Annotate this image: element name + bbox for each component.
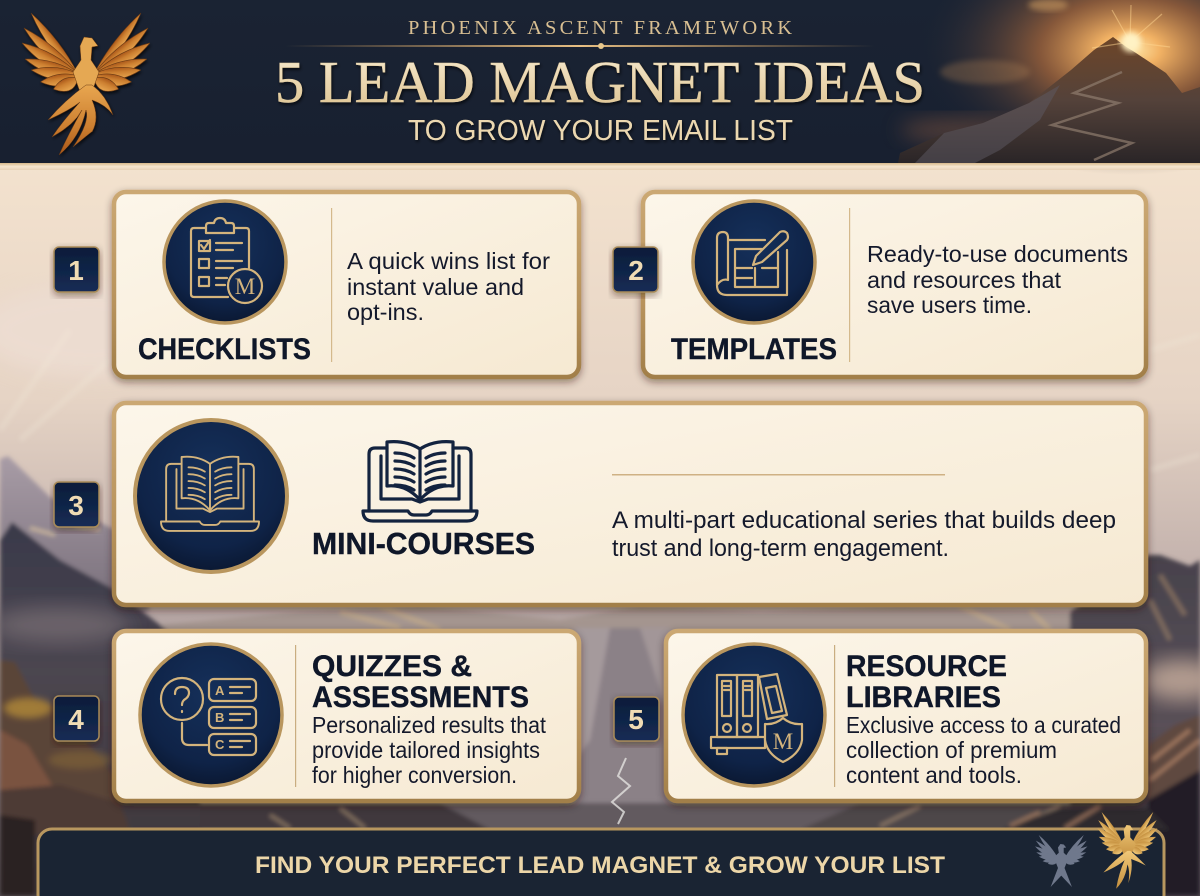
- description: save users time.: [867, 292, 1032, 318]
- badge 2: 2: [628, 255, 644, 286]
- icon: question and answer options: C: [215, 737, 225, 752]
- panel 1: checklists: [114, 192, 579, 377]
- description: Personalized results that: [312, 712, 547, 738]
- heading: MINI-COURSES: [312, 526, 535, 561]
- description: [612, 507, 1116, 562]
- call to action: FIND YOUR PERFECT LEAD MAGNET & GROW YOUR LIST: [255, 852, 945, 879]
- badge 4: 4: [68, 704, 84, 735]
- description: Exclusive access to a curated: [846, 712, 1121, 738]
- description: and resources that: [867, 267, 1062, 293]
- description: [846, 712, 1121, 788]
- sunset glow and mountain: [898, 0, 1200, 175]
- description: provide tailored insights: [312, 737, 540, 763]
- icon: question and answer options: A: [215, 683, 225, 698]
- eyebrow: framework name: PHOENIX ASCENT FRAMEWORK: [408, 17, 792, 39]
- heading: QUIZZES &: [312, 650, 472, 683]
- badge 5: [614, 697, 659, 741]
- icon: binders and shield: M: [773, 729, 793, 754]
- header banner: [0, 0, 1200, 175]
- footer banner: [38, 811, 1164, 896]
- badge 4: [54, 696, 99, 741]
- icon: book on laptop in gold disc: [135, 420, 287, 572]
- description: content and tools.: [846, 762, 1022, 788]
- badge 2: [613, 247, 658, 292]
- badge 3: 3: [68, 490, 84, 521]
- main title: 5 LEAD MAGNET IDEAS: [275, 49, 925, 115]
- badge 1: [54, 247, 99, 292]
- description: opt-ins.: [347, 299, 424, 325]
- heading: ASSESSMENTS: [312, 681, 529, 714]
- panel 4: quizzes and assessments: [114, 631, 579, 801]
- heading: RESOURCE: [846, 650, 1007, 683]
- description: Ready-to-use documents: [867, 241, 1128, 267]
- logo: phoenix: [19, 11, 153, 155]
- heading: [846, 650, 1007, 714]
- icon: question and answer options: B: [215, 710, 224, 725]
- description: A multi-part educational series that builds deep: [612, 507, 1116, 534]
- description: trust and long-term engagement.: [612, 535, 949, 562]
- icon: blueprint and pencil: [693, 201, 815, 323]
- heading: LIBRARIES: [846, 681, 1001, 714]
- band under header: [0, 163, 1200, 170]
- icon: clipboard checklist: M: [235, 274, 255, 299]
- icon: navy line book on laptop: [363, 442, 477, 521]
- heading: CHECKLISTS: [138, 333, 311, 366]
- description: collection of premium: [846, 737, 1057, 763]
- description: A quick wins list for: [347, 248, 550, 274]
- panel 5: resource libraries: [666, 631, 1146, 801]
- heading: [312, 650, 529, 714]
- badge 1: 1: [68, 255, 84, 286]
- icon: binders and shield: [683, 644, 825, 786]
- description: instant value and: [347, 274, 524, 300]
- description: [867, 241, 1128, 318]
- subtitle: TO GROW YOUR EMAIL LIST: [408, 115, 793, 147]
- heading: TEMPLATES: [671, 333, 837, 366]
- icon: grey phoenix mark: [1034, 834, 1089, 887]
- description: [347, 248, 550, 325]
- description: [312, 712, 547, 788]
- icon: gold phoenix mark: [1096, 811, 1159, 889]
- badge 3: [54, 482, 99, 527]
- icon: question and answer options: [140, 644, 282, 786]
- panel 2: templates: [643, 192, 1146, 377]
- icon: clipboard checklist: [164, 201, 286, 323]
- ornament rule: [285, 43, 875, 49]
- description: for higher conversion.: [312, 762, 517, 788]
- panel 3: mini-courses: [114, 403, 1146, 605]
- badge 5: 5: [628, 704, 644, 735]
